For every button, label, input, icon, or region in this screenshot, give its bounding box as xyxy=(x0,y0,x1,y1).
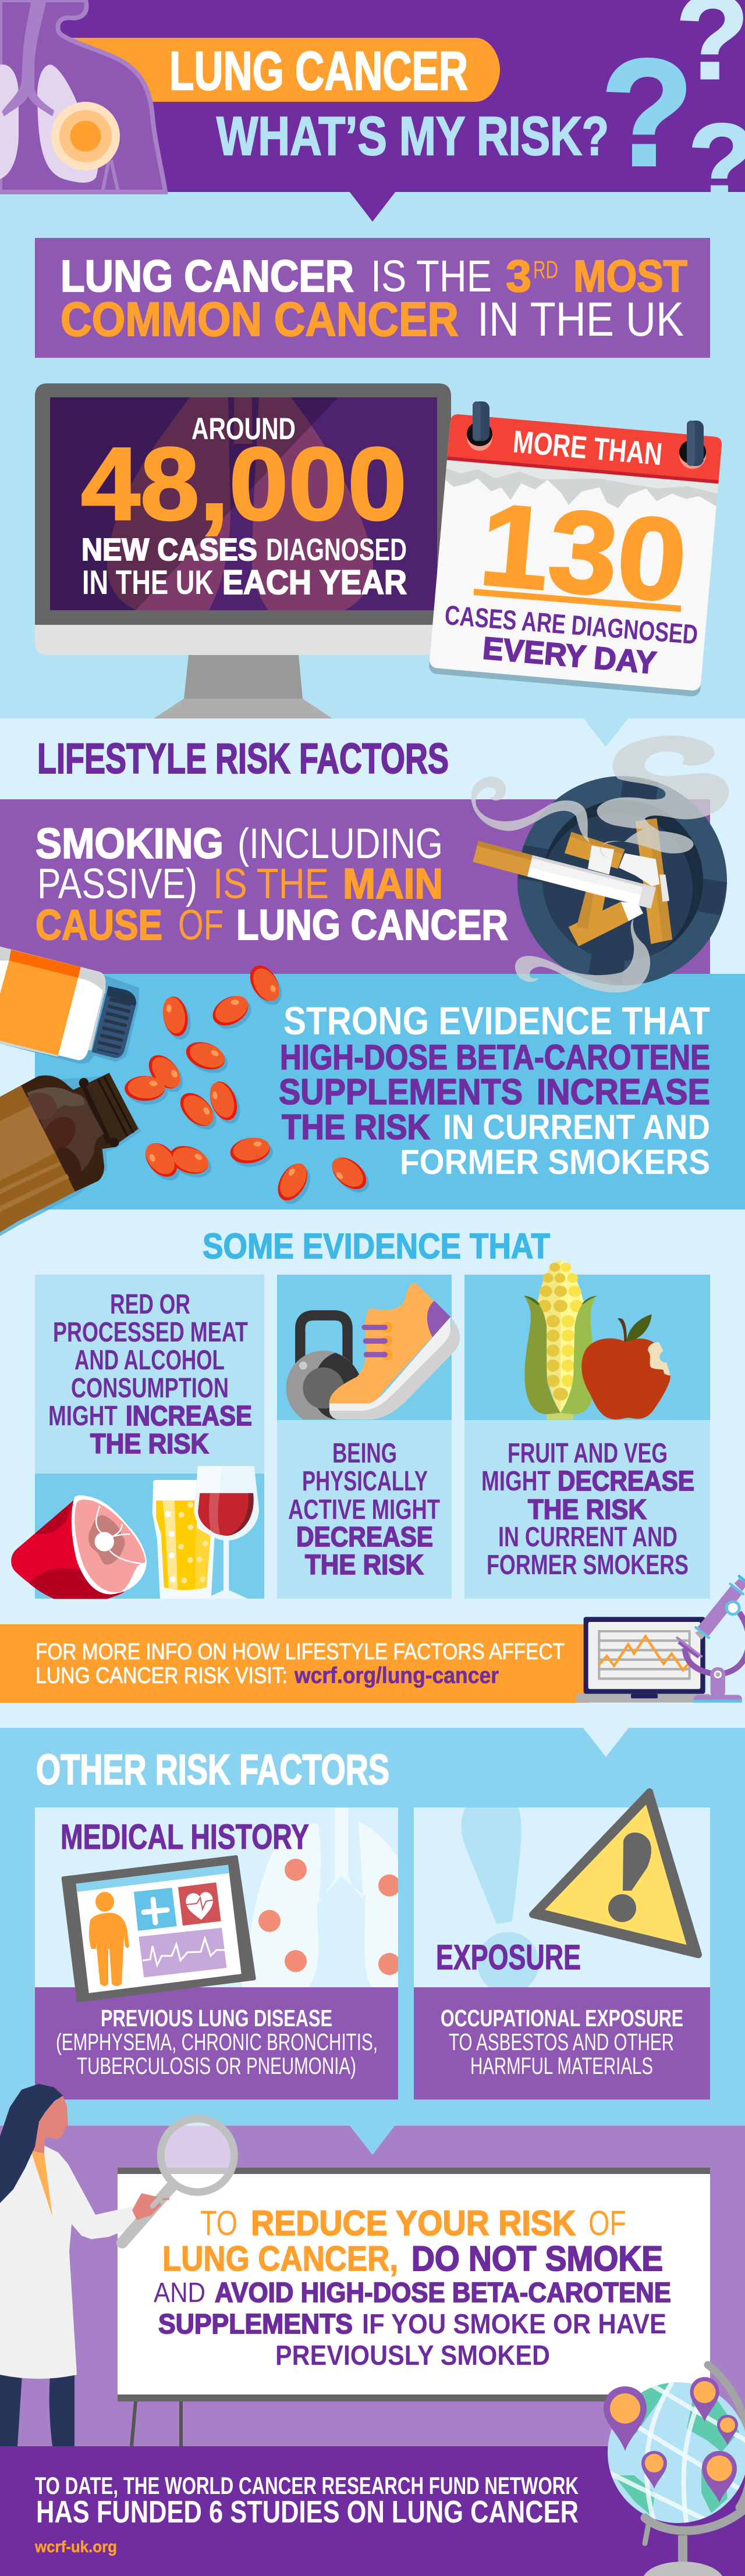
text: every day: EVERY DAY xyxy=(481,631,658,681)
text: strong evidence: INCREASE xyxy=(537,1072,710,1112)
icon: ashtray with cigarettes and smoke xyxy=(471,735,729,992)
icon: question marks: ? xyxy=(601,27,694,198)
text: reduce your risk: OF xyxy=(588,2204,626,2243)
text: smoking statement: LUNG CANCER xyxy=(236,902,508,949)
panel: smoking xyxy=(0,735,729,992)
text: physically active: PHYSICALLY xyxy=(302,1466,428,1497)
text: more info: wcrf.org/lung-cancer xyxy=(294,1663,499,1688)
panel: physical activity xyxy=(277,1275,460,1599)
text: strong evidence: THE RISK xyxy=(282,1108,430,1147)
heading: what's my risk: WHAT’S MY RISK? xyxy=(217,105,609,166)
text: strong evidence xyxy=(279,999,710,1182)
stat line one xyxy=(61,251,687,301)
text: reduce your risk: TO xyxy=(200,2204,237,2243)
icon: apple xyxy=(581,1314,672,1419)
panel: meat and alcohol xyxy=(11,1275,264,1601)
icon: warning triangle xyxy=(533,1792,698,1955)
text: reduce your risk: SUPPLEMENTS xyxy=(158,2309,353,2340)
panel: exposure xyxy=(414,1792,710,2100)
panel: supplements background xyxy=(35,974,745,1209)
text: in the uk each year xyxy=(82,564,407,602)
heading: medical history: MEDICAL HISTORY xyxy=(61,1817,309,1856)
text: in the uk each year: EACH YEAR xyxy=(222,564,407,602)
text: physically active: BEING xyxy=(332,1438,397,1469)
icon: spilled pills xyxy=(125,960,375,1209)
text: smoking statement: MAIN xyxy=(343,860,443,908)
text: more than: MORE THAN xyxy=(512,424,664,472)
text: funded studies: HAS FUNDED 6 STUDIES ON LUNG CANCER xyxy=(36,2495,579,2529)
text: meat and alcohol: INCREASE xyxy=(126,1401,252,1432)
text: new cases diagnosed xyxy=(81,532,407,567)
title pill xyxy=(70,38,500,102)
text: physically active: THE RISK xyxy=(305,1550,424,1581)
text: physically active: DECREASE xyxy=(296,1522,433,1553)
panel: calendar with daily cases xyxy=(428,401,722,697)
text: meat and alcohol: THE RISK xyxy=(90,1429,209,1460)
text: reduce your risk: PREVIOUSLY SMOKED xyxy=(275,2340,550,2371)
icon: question marks xyxy=(601,0,745,225)
icon: globe with map pins xyxy=(604,2365,745,2576)
number: 48,000: 48,000 xyxy=(81,426,407,542)
text: reduce your risk: AND xyxy=(154,2278,205,2308)
text: in the uk each year: IN THE UK xyxy=(82,564,214,602)
stat line one: RD xyxy=(533,256,558,284)
heading: exposure: EXPOSURE xyxy=(436,1938,581,1977)
stat line one: IS THE xyxy=(371,251,492,301)
text: reduce your risk: LUNG CANCER, xyxy=(162,2239,398,2278)
heading: other risk factors: OTHER RISK FACTORS xyxy=(36,1746,389,1794)
text: smoking statement: SMOKING xyxy=(36,820,224,867)
icon: monitor stand xyxy=(154,655,332,718)
text: previous lung disease xyxy=(56,2005,378,2079)
text: reduce your risk: DO NOT SMOKE xyxy=(411,2239,663,2278)
text: meat and alcohol xyxy=(48,1289,252,1460)
text: meat and alcohol: CONSUMPTION xyxy=(71,1373,229,1404)
heading: lung cancer: LUNG CANCER xyxy=(169,40,468,101)
icon: exclamation background xyxy=(461,1808,539,1994)
panel: fruit and veg xyxy=(464,1260,710,1599)
text: smoking statement: OF xyxy=(178,902,224,949)
heading: lifestyle risk factors: LIFESTYLE RISK FACTORS xyxy=(37,735,449,782)
text: meat and alcohol: RED OR xyxy=(110,1289,190,1320)
heading: some evidence that: SOME EVIDENCE THAT xyxy=(203,1226,550,1266)
text: more info xyxy=(36,1639,565,1688)
text: smoking statement: (INCLUDING xyxy=(237,820,443,867)
text: physically active: ACTIVE MIGHT xyxy=(288,1495,440,1525)
icon: tablet with health record xyxy=(63,1857,254,2001)
text: physically active xyxy=(288,1438,440,1581)
panel: footer xyxy=(34,2365,745,2576)
text: fruit and veg: IN CURRENT AND xyxy=(498,1522,677,1553)
stat line two: COMMON CANCER xyxy=(61,292,459,346)
icon: brown supplement bottle xyxy=(0,1073,141,1236)
icon: corn xyxy=(524,1260,597,1420)
text: strong evidence: SUPPLEMENTS xyxy=(279,1072,523,1112)
text: reduce your risk: IF YOU SMOKE OR HAVE xyxy=(362,2309,666,2340)
icon: laptop with chart xyxy=(576,1617,710,1703)
text: previous lung disease: TUBERCULOSIS OR PNEUMONIA) xyxy=(77,2052,356,2079)
stat line one: 3 xyxy=(506,251,531,301)
text: meat and alcohol: AND ALCOHOL xyxy=(74,1345,225,1376)
text: new cases diagnosed: NEW CASES xyxy=(81,532,257,567)
text: reduce your risk xyxy=(154,2204,671,2371)
text: more info: FOR MORE INFO ON HOW LIFESTYLE FACTORS AFFECT xyxy=(36,1639,565,1664)
text: fruit and veg: FRUIT AND VEG xyxy=(508,1438,668,1469)
icon: ham xyxy=(11,1495,147,1601)
text: strong evidence: FORMER SMOKERS xyxy=(400,1143,710,1182)
text: previous lung disease: (EMPHYSEMA, CHRONIC BRONCHITIS, xyxy=(56,2029,378,2055)
text: occupational exposure xyxy=(441,2005,683,2079)
text: website: wcrf-uk.org xyxy=(34,2538,117,2556)
icon: running shoe xyxy=(329,1283,460,1419)
icon: kettlebell xyxy=(286,1315,362,1425)
text: reduce your risk: AVOID HIGH-DOSE BETA-CAROTENE xyxy=(215,2278,671,2308)
icon: body with lungs and tumour xyxy=(0,0,165,192)
text: new cases diagnosed: DIAGNOSED xyxy=(266,532,407,567)
icon: wine glass xyxy=(194,1466,259,1599)
text: smoking statement: CAUSE xyxy=(36,902,162,949)
text: fruit and veg: THE RISK xyxy=(528,1495,647,1525)
text: fruit and veg: MIGHT xyxy=(481,1466,551,1497)
icon: lungs background xyxy=(242,1808,400,1987)
text: smoking statement: PASSIVE) xyxy=(37,860,197,908)
panel: third most common xyxy=(35,238,710,358)
text: fruit and veg xyxy=(481,1438,694,1581)
text: meat and alcohol: PROCESSED MEAT xyxy=(53,1317,248,1348)
text: strong evidence: IN CURRENT AND xyxy=(443,1108,710,1147)
text: meat and alcohol: MIGHT xyxy=(48,1401,118,1432)
icon: white supplement bottle xyxy=(0,947,139,1064)
number: 130: 130 xyxy=(475,479,691,627)
text: more info: LUNG CANCER RISK VISIT: xyxy=(36,1663,288,1688)
text: fruit and veg: DECREASE xyxy=(558,1466,694,1497)
icon: beer glass xyxy=(152,1480,217,1599)
text: smoking statement xyxy=(36,820,508,949)
stat line two: IN THE UK xyxy=(477,292,684,346)
text: around: AROUND xyxy=(191,412,296,446)
stat line one: LUNG CANCER xyxy=(61,251,354,301)
panel: monitor with yearly cases xyxy=(35,383,451,718)
text: world cancer research fund: TO DATE, THE WORLD CANCER RESEARCH FUND NETWORK xyxy=(35,2472,579,2499)
text: occupational exposure: HARMFUL MATERIALS xyxy=(470,2052,653,2079)
panel: more info bar xyxy=(0,1576,745,1703)
text: previous lung disease: PREVIOUS LUNG DISEASE xyxy=(101,2005,332,2031)
panel: header xyxy=(0,0,745,225)
icon: microscope xyxy=(676,1576,745,1703)
panel: supplements xyxy=(0,947,710,1236)
text: smoking statement: IS THE xyxy=(213,860,329,908)
text: reduce your risk: REDUCE YOUR RISK xyxy=(251,2204,576,2243)
panel: advice board xyxy=(118,2168,710,2446)
icon: doctor with magnifying glass xyxy=(0,2084,234,2446)
stat line one: MOST xyxy=(573,251,687,301)
panel: medical history xyxy=(35,1808,400,2100)
